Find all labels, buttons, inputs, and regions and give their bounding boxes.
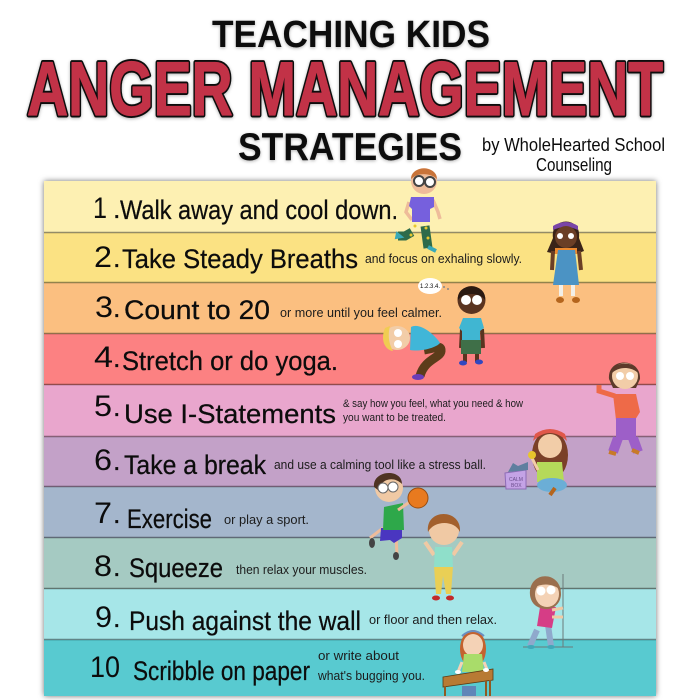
- strategy 5: .: [113, 392, 121, 422]
- icon: boy walking with glasses: [396, 168, 440, 251]
- strategy 1: Walk away and cool down.: [120, 195, 398, 225]
- strategy 8: then relax your muscles.: [236, 562, 367, 577]
- strategy 5: 5: [94, 390, 112, 423]
- strategy 6: and use a calming tool like a stress ball.: [274, 457, 486, 472]
- credit: WholeHearted School Counseling: Counseling: [536, 155, 612, 175]
- callout: counting thought bubble: 1.2.3.4.: [420, 283, 440, 290]
- icon: girl with calm box: BOX: [511, 483, 522, 489]
- icon: girl with calm box: CALM: [509, 477, 523, 483]
- strategy 10: what's bugging you.: [317, 668, 425, 683]
- strategy 8: .: [113, 552, 121, 582]
- title: Strategies: STRATEGIES: [238, 126, 462, 169]
- strategy 5: Use I-Statements: [124, 399, 336, 429]
- strategy 9: [95, 601, 497, 636]
- strategy 2: and focus on exhaling slowly.: [365, 251, 522, 266]
- strategy 4: Stretch or do yoga.: [122, 346, 338, 376]
- strategy 6: 6: [94, 444, 112, 477]
- strategy 7: [94, 497, 309, 534]
- icon: girl scribbling at desk: [443, 630, 493, 696]
- strategy 9: .: [113, 603, 121, 633]
- icon: child bending in yoga stretch: [383, 326, 441, 380]
- strategy 7: .: [113, 499, 121, 529]
- strategy 10: Scribble on paper: [133, 656, 310, 686]
- strategy 9: or floor and then relax.: [369, 612, 497, 627]
- credit: WholeHearted School Counseling: [482, 135, 665, 175]
- strategy 6: [94, 444, 486, 480]
- strategy 1: 1: [93, 192, 107, 225]
- strategy 2: [94, 241, 522, 274]
- strategy 3: or more until you feel calmer.: [280, 305, 442, 320]
- icon: boy counting: [458, 286, 486, 366]
- strategy 4: .: [113, 343, 121, 373]
- icon: girl pushing against wall: [523, 574, 573, 649]
- strategy 2: .: [113, 243, 121, 273]
- icon: boy with basketball: [369, 473, 428, 560]
- strategy 8: Squeeze: [129, 553, 223, 583]
- strategy 5: you want to be treated.: [343, 412, 446, 424]
- strategy 9: 9: [95, 601, 112, 634]
- strategy 6: .: [113, 446, 121, 476]
- strategy 7: or play a sport.: [224, 512, 309, 527]
- strategy 8: [94, 550, 367, 583]
- strategy 5: [94, 390, 523, 429]
- icon: boy squeezing muscles: [425, 514, 462, 600]
- strategy 10: [90, 648, 425, 686]
- strategy 7: Exercise: [127, 504, 212, 534]
- strategy 3: 3: [95, 291, 113, 324]
- strategy 7: 7: [94, 497, 112, 530]
- strategy 2: 2: [94, 241, 112, 274]
- strategy 3: Count to 20: [124, 295, 270, 325]
- icon: girl in blue dress breathing: [547, 222, 584, 303]
- strategy 4: 4: [94, 341, 113, 374]
- strategy 1: .: [113, 194, 121, 224]
- strategy 8: 8: [94, 550, 112, 583]
- icon: girl with calm box: [505, 429, 568, 495]
- title: Teaching Kids: TEACHING KIDS: [212, 14, 490, 56]
- strategy 2: Take Steady Breaths: [122, 244, 358, 274]
- strategy 9: Push against the wall: [129, 606, 361, 636]
- strategy 3: [95, 291, 442, 325]
- panel: strategy bands: [44, 181, 656, 696]
- strategy 6: Take a break: [124, 450, 266, 480]
- callout: counting thought bubble: [418, 278, 449, 294]
- strategy 5: & say how you feel, what you need & how: [343, 398, 523, 410]
- strategy 3: .: [113, 293, 121, 323]
- strategy 10: 10: [90, 651, 120, 684]
- strategy 10: or write about: [318, 648, 399, 663]
- credit: WholeHearted School Counseling: by WholeHearted School: [482, 135, 665, 155]
- icon: girl holding up hand: [599, 362, 640, 454]
